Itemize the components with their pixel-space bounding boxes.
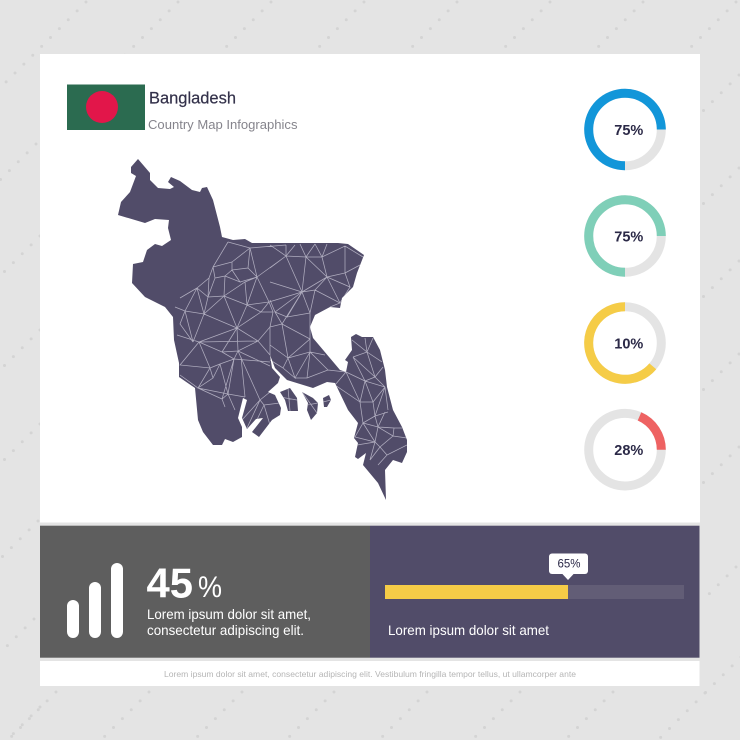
progress bar track bbox=[385, 585, 684, 599]
donut chart: 75% teal: 75% bbox=[614, 230, 643, 246]
donut chart: 28% red bbox=[589, 413, 661, 486]
donut chart: 75% blue: 75% bbox=[614, 123, 643, 139]
panel: white map card bbox=[40, 54, 700, 522]
title: Bangladesh: Bangladesh bbox=[149, 90, 236, 108]
donut chart: 75% teal bbox=[589, 200, 661, 272]
icon: Bangladesh flag bbox=[67, 84, 145, 130]
donut chart: 10% yellow bbox=[589, 307, 661, 379]
panel: footer: Lorem ipsum dolor sit amet, consectetur adipiscing elit. Vestibulum fringilla tempor tellus, ut ullamcorper ante bbox=[164, 669, 576, 679]
icon: signal bars bbox=[67, 563, 123, 638]
donut chart: 75% blue bbox=[589, 93, 661, 166]
tooltip: 65% bbox=[549, 554, 588, 580]
caption: Lorem ipsum dolor sit amet bbox=[388, 622, 549, 638]
panel: footer bbox=[40, 661, 700, 686]
subtitle: Country Map Infographics bbox=[148, 117, 298, 132]
map: Bangladesh low-poly bbox=[118, 159, 407, 500]
text block: consectetur adipiscing elit. bbox=[147, 622, 304, 638]
progress bar fill bbox=[385, 585, 568, 599]
panel: purple progress bbox=[370, 526, 700, 658]
tooltip: 65%: 65% bbox=[557, 558, 581, 570]
donut chart: 10% yellow: 10% bbox=[614, 336, 643, 352]
stat: 45%: 45 bbox=[146, 560, 193, 606]
stat: percent sign: % bbox=[198, 571, 222, 604]
panel: grey stat bbox=[40, 526, 370, 658]
donut chart: 28% red: 28% bbox=[614, 443, 643, 459]
text block: Lorem ipsum dolor sit amet, bbox=[147, 606, 311, 622]
